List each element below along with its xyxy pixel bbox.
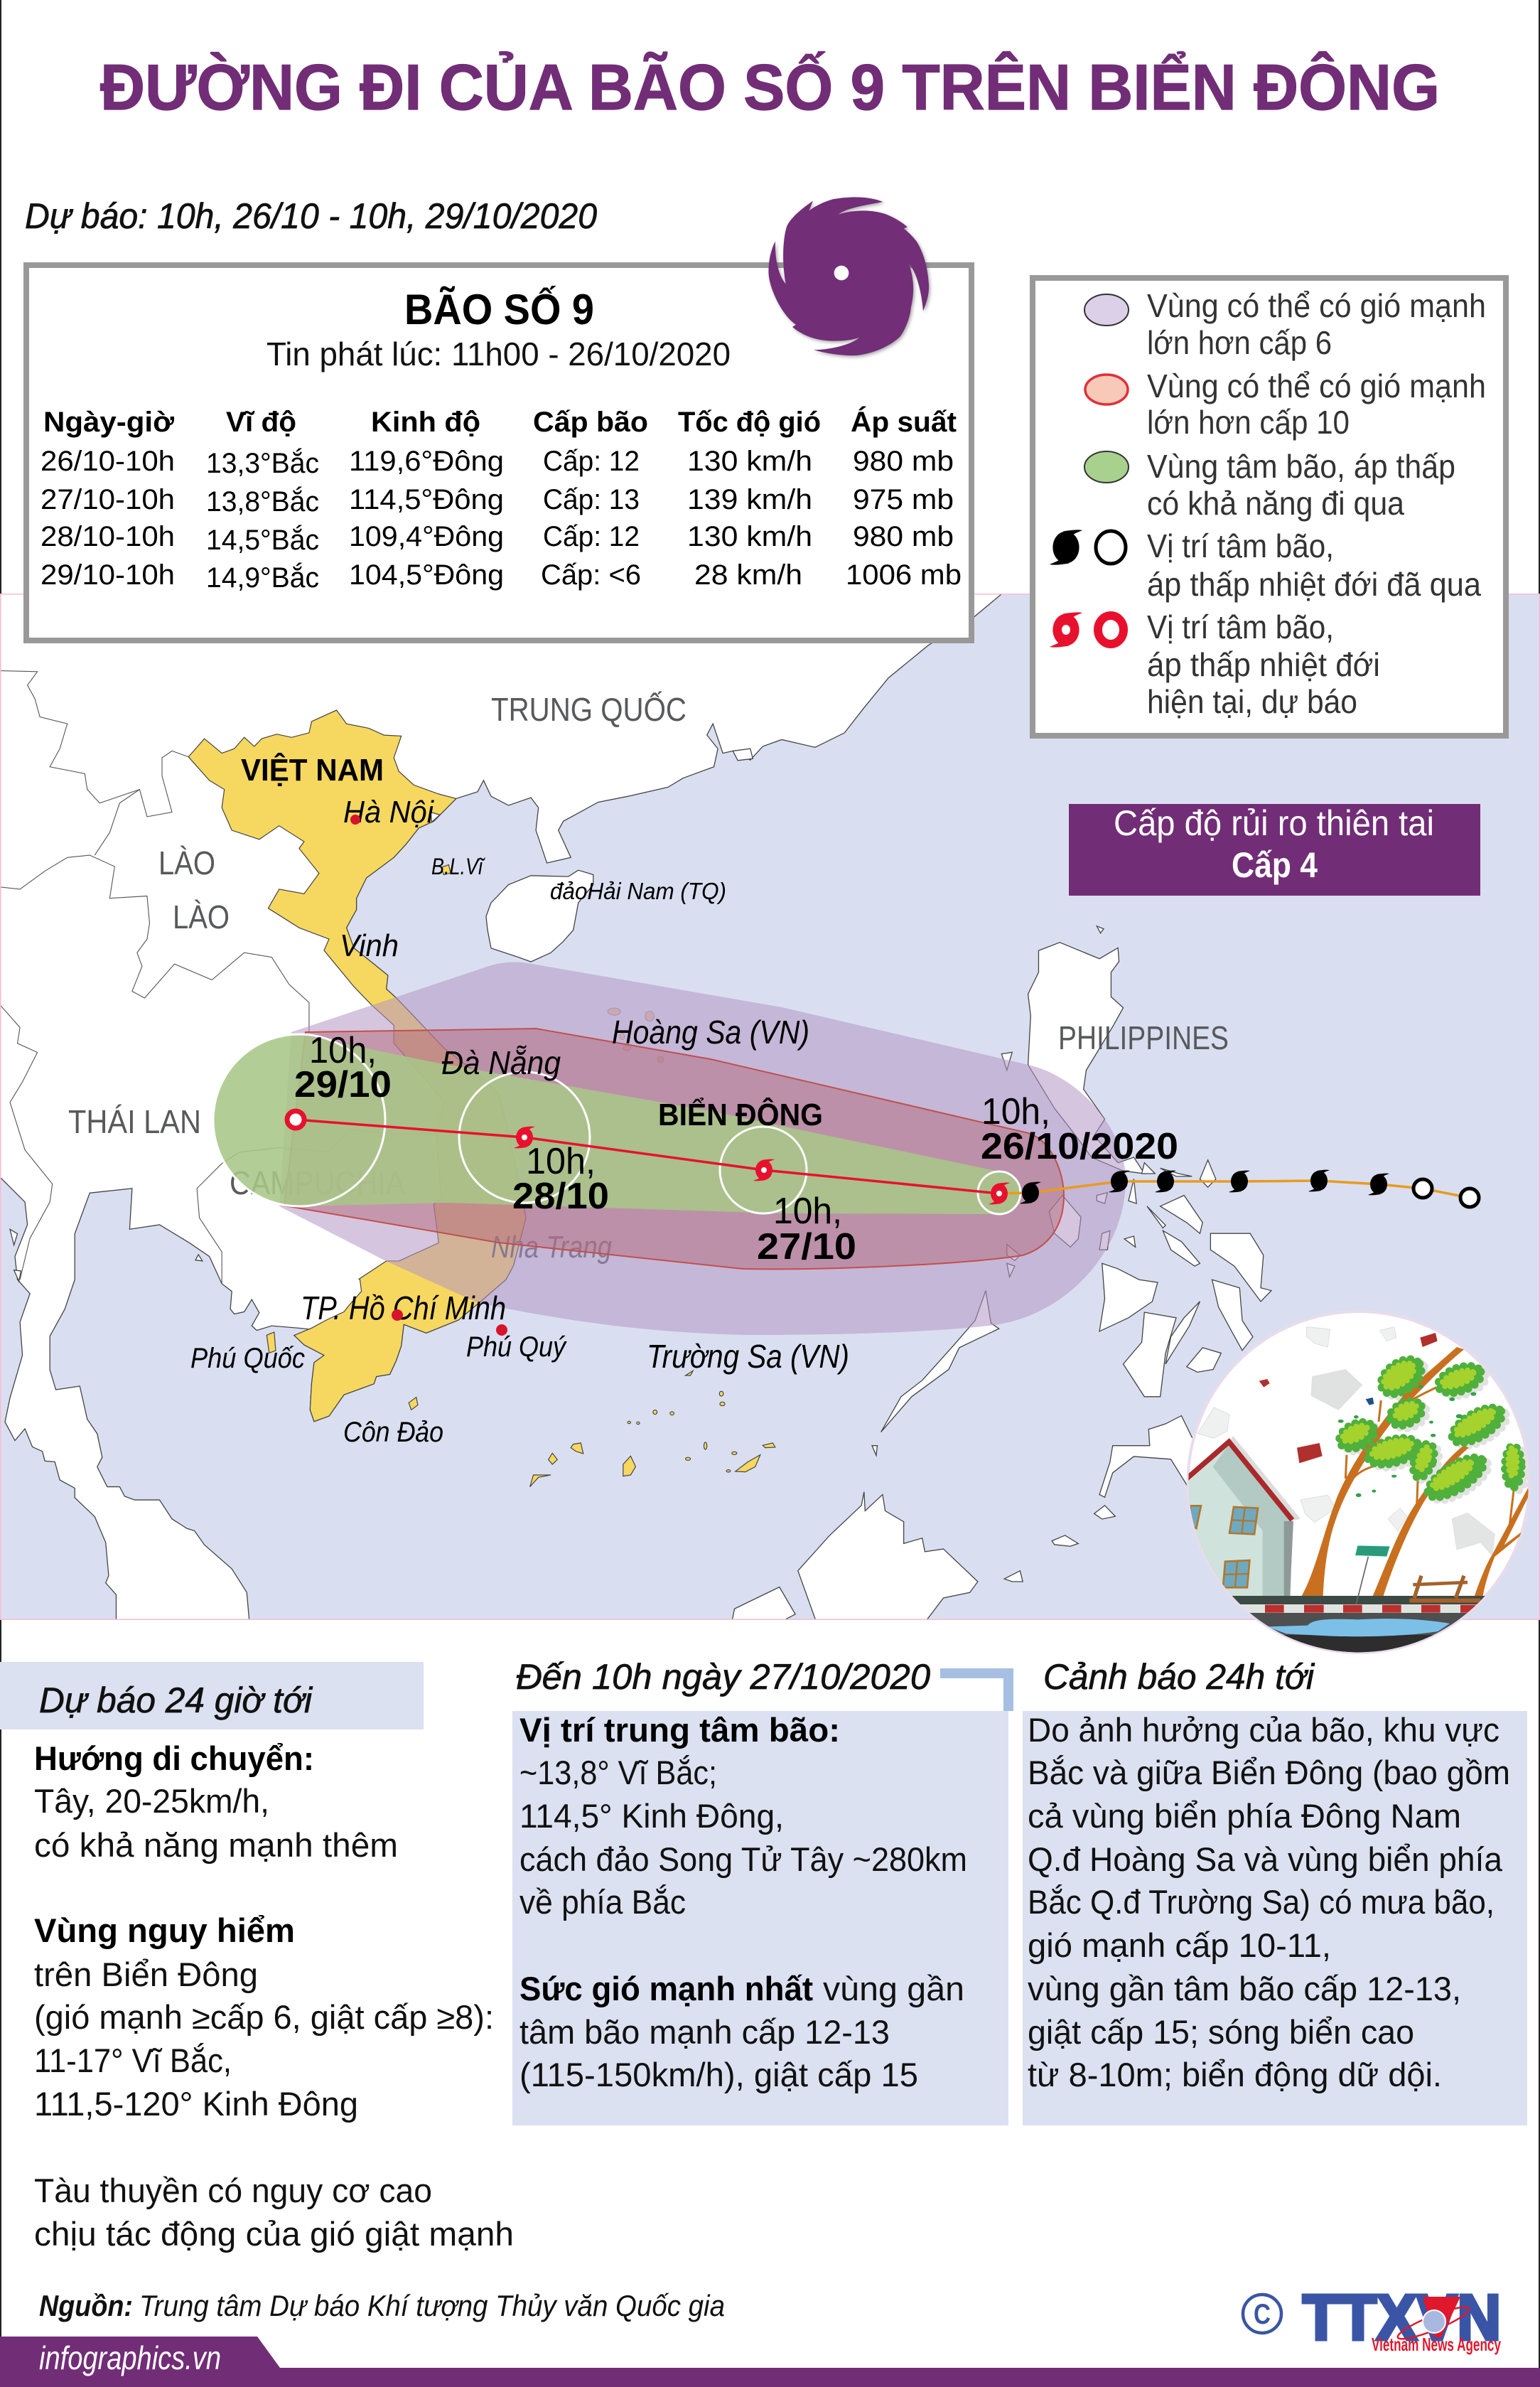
- movement direction text: có khả năng mạnh thêm: [34, 1826, 398, 1864]
- table row 26/10: 130 km/h: [687, 446, 812, 477]
- forecast track line: [296, 1120, 999, 1194]
- danger zone text: trên Biển Đông: [34, 1956, 258, 1993]
- country labels: THÁI LAN: [68, 1103, 201, 1140]
- trees: [1302, 1347, 1529, 1596]
- legend: wind above level 6: lớn hơn cấp 6: [1147, 324, 1332, 361]
- title: ĐƯỜNG ĐI CỦA BÃO SỐ 9 TRÊN BIỂN ĐÔNG: [100, 51, 1440, 124]
- fence: [1409, 1576, 1480, 1601]
- panel: 24h warning text: Bắc và giữa Biển Đông (bao gồm: [1028, 1754, 1510, 1791]
- forecast storm positions: [287, 1111, 1010, 1204]
- table row 29/10: 29/10-10h: [41, 559, 175, 591]
- country labels: TRUNG QUỐC: [491, 691, 686, 728]
- place labels: [190, 795, 849, 1448]
- wind strength text: [519, 1970, 964, 2093]
- table header: Áp suất: [851, 406, 957, 438]
- danger zone text: (gió mạnh ≥cấp 6, giật cấp ≥8):: [34, 1998, 494, 2036]
- legend: wind above level 10: Vùng có thể có gió mạnh: [1147, 368, 1486, 404]
- table row 28/10: Cấp: 12: [543, 521, 640, 552]
- country labels: LÀO: [158, 844, 215, 881]
- country labels: BIỂN ĐÔNG: [658, 1096, 823, 1132]
- logo: TTXVN: TTXVN: [1303, 2283, 1501, 2354]
- ships warning text: chịu tác động của gió giật mạnh: [34, 2215, 514, 2253]
- table row 27/10: 139 km/h: [687, 484, 812, 515]
- table row 26/10: 980 mb: [853, 446, 954, 477]
- table row 26/10: [41, 446, 954, 479]
- table row 29/10: [41, 559, 962, 594]
- islands: Hoàng Sa: [608, 1008, 664, 1063]
- danger zone text: 111,5-120° Kinh Đông: [34, 2085, 358, 2123]
- panel: 24-hour forecast: [0, 1662, 514, 2253]
- position text: cách đảo Song Tử Tây ~280km: [519, 1840, 967, 1878]
- illustration: storm damage scene: [1187, 1311, 1530, 1656]
- table row 29/10: 28 km/h: [694, 559, 802, 591]
- danger zone text: [34, 1911, 494, 2123]
- land: Philippines and Borneo: [732, 926, 1271, 1622]
- legend: wind above level 6: Vùng có thể có gió mạnh: [1147, 287, 1486, 324]
- footer bar: [0, 2337, 1540, 2387]
- country labels: PHILIPPINES: [1058, 1019, 1229, 1056]
- danger zone text: Vùng nguy hiểm: [34, 1911, 295, 1949]
- panel: legend: [1033, 278, 1506, 736]
- panel: storm data table: [26, 265, 971, 640]
- land: Hainan: [486, 870, 593, 962]
- ships warning text: [34, 2172, 514, 2253]
- panel: 24h warning text: Bắc Q.đ Trường Sa) có mưa bão,: [1028, 1883, 1495, 1921]
- table row 27/10: 114,5°Đông: [349, 484, 504, 515]
- wind strength text: tâm bão mạnh cấp 12-13: [519, 2013, 890, 2051]
- table row 26/10: 119,6°Đông: [349, 446, 504, 477]
- map panel: [0, 594, 1540, 1622]
- table row 27/10: 975 mb: [853, 484, 954, 515]
- road and kerb: [1187, 1596, 1530, 1604]
- table row 28/10: 28/10-10h: [41, 521, 175, 552]
- icon: purple hurricane: [768, 197, 929, 355]
- panel: 24h warning text: vùng gần tâm bão cấp 12-13,: [1028, 1970, 1461, 2007]
- date labels on track: 10h,: [309, 1030, 377, 1071]
- position text: ~13,8° Vĩ Bắc;: [519, 1754, 717, 1791]
- footer bar: infographics.vn: [39, 2339, 221, 2376]
- place labels: B.L.Vĩ: [431, 854, 485, 879]
- heading: by 10h 27/10: Đến 10h ngày 27/10/2020: [516, 1657, 930, 1697]
- flying leaves: [1338, 1385, 1476, 1497]
- legend: wind above level 10: [1085, 368, 1486, 441]
- ships warning text: Tàu thuyền có nguy cơ cao: [34, 2172, 432, 2209]
- place labels: Côn Đảo: [343, 1417, 443, 1448]
- table header: [43, 406, 957, 438]
- zone: storm centre path: [213, 1034, 1021, 1214]
- tree foliage shadows: [1340, 1355, 1526, 1508]
- past storm positions: [1020, 1170, 1389, 1203]
- table row 28/10: [41, 521, 954, 556]
- place labels: Phú Quốc: [190, 1343, 305, 1374]
- table row 27/10: 13,8°Bắc: [206, 486, 319, 517]
- banner: disaster risk level: Cấp 4: [1232, 845, 1318, 885]
- source credit: Trung tâm Dự báo Khí tượng Thủy văn Quốc gia: [139, 2289, 725, 2322]
- place labels: Hoàng Sa (VN): [612, 1014, 809, 1051]
- place labels: TP. Hồ Chí Minh: [301, 1289, 506, 1326]
- table header: Kinh độ: [371, 407, 480, 438]
- label: Campuchia: CAMPUCHIA: [230, 1164, 405, 1201]
- past track line: [999, 1181, 1470, 1198]
- movement direction text: Hướng di chuyển:: [34, 1739, 314, 1777]
- panel: 24h warning text: giật cấp 15; sóng biển cao: [1028, 2013, 1414, 2051]
- legend: past positions: áp thấp nhiệt đới đã qua: [1147, 566, 1481, 603]
- legend: current and forecast positions: hiện tại, dự báo: [1147, 683, 1357, 720]
- table row 27/10: [41, 484, 954, 517]
- road sign: [1355, 1545, 1390, 1557]
- legend: wind above level 6: [1084, 287, 1486, 361]
- table row 29/10: 1006 mb: [846, 559, 962, 591]
- table row 27/10: Cấp: 13: [543, 484, 640, 515]
- issue time: Tin phát lúc: 11h00 - 26/10/2020: [266, 336, 731, 372]
- wind strength text: (115-150km/h), giật cấp 15: [519, 2056, 918, 2093]
- panel: 24h warning text: cả vùng biển phía Đông Nam: [1028, 1797, 1461, 1835]
- panel: 24h warning text: Do ảnh hưởng của bão, khu vực: [1028, 1711, 1499, 1749]
- heading banner: [0, 1662, 424, 1729]
- country labels: VIỆT NAM: [241, 752, 384, 788]
- position text: [519, 1711, 967, 1921]
- panel: 24h warning text: từ 8-10m; biển động dữ dội.: [1028, 2056, 1442, 2093]
- banner: disaster risk level: Cấp độ rủi ro thiên tai: [1114, 803, 1434, 843]
- legend: past positions: Vị trí tâm bão,: [1147, 527, 1334, 564]
- panel: storm position: [512, 1711, 1008, 2125]
- label: Nha Trang: Nha Trang: [491, 1230, 612, 1265]
- table row 28/10: 109,4°Đông: [349, 521, 504, 552]
- past depression positions: [1414, 1179, 1479, 1207]
- place labels: Phú Quý: [466, 1331, 568, 1363]
- legend: storm centre zone: Vùng tâm bão, áp thấp: [1147, 448, 1455, 485]
- movement direction text: Tây, 20-25km/h,: [34, 1782, 269, 1820]
- table row 27/10: 27/10-10h: [41, 484, 175, 515]
- land: Asian mainland: [0, 594, 1002, 1621]
- legend: storm centre zone: [1084, 448, 1455, 522]
- wind strength text: Sức gió mạnh nhất: [519, 1970, 813, 2007]
- position text: 114,5° Kinh Đông,: [519, 1797, 784, 1835]
- panel: 24h warning text: [1023, 1711, 1527, 2125]
- panel: 24h warning text: gió mạnh cấp 10-11,: [1028, 1926, 1331, 1964]
- papers and debris: [1197, 1327, 1495, 1555]
- source credit: Nguồn:: [39, 2289, 133, 2322]
- legend: current and forecast positions: Vị trí tâm bão,: [1147, 608, 1334, 645]
- table row 26/10: 26/10-10h: [41, 446, 175, 477]
- place labels: Đà Nẵng: [441, 1044, 561, 1081]
- table header: Tốc độ gió: [678, 407, 821, 438]
- date labels on track: 10h,: [773, 1191, 842, 1232]
- legend: current and forecast positions: áp thấp nhiệt đới: [1147, 646, 1380, 683]
- forecast radius circles: [213, 1034, 1021, 1214]
- heading: 24h warning: Cảnh báo 24h tới: [1043, 1657, 1315, 1697]
- date labels on track: 26/10/2020: [981, 1126, 1178, 1167]
- legend: storm centre zone: có khả năng đi qua: [1147, 485, 1404, 522]
- table row 28/10: 14,5°Bắc: [206, 524, 319, 556]
- date labels on track: 27/10: [757, 1226, 856, 1267]
- connector bracket: [940, 1673, 1008, 1711]
- date labels on track: 10h,: [981, 1091, 1050, 1132]
- legend: current and forecast positions: [1050, 608, 1380, 720]
- place labels: Vinh: [340, 928, 399, 963]
- table row 28/10: 130 km/h: [687, 521, 812, 552]
- table header: Ngày-giờ: [43, 407, 175, 438]
- table row 29/10: 14,9°Bắc: [206, 562, 319, 594]
- place labels: Hà Nội: [343, 795, 434, 830]
- table row 29/10: 104,5°Đông: [349, 559, 504, 591]
- table header: Vĩ độ: [226, 407, 296, 438]
- place labels: đảoHải Nam (TQ): [550, 878, 726, 904]
- heading banner: Dự báo 24 giờ tới: [39, 1680, 313, 1720]
- panel: 24h warning text: Q.đ Hoàng Sa và vùng biển phía: [1028, 1840, 1503, 1878]
- table row 29/10: Cấp: <6: [541, 559, 641, 591]
- forecast period subtitle: Dự báo: 10h, 26/10 - 10h, 29/10/2020: [25, 196, 597, 236]
- house: [1227, 1436, 1301, 1521]
- date labels on track: 28/10: [512, 1176, 609, 1217]
- legend: wind above level 10: lớn hơn cấp 10: [1147, 404, 1350, 441]
- position text: Vị trí trung tâm bão:: [519, 1711, 840, 1749]
- legend: past positions: [1050, 527, 1481, 603]
- city dots: [350, 815, 507, 1336]
- zone: strong wind above level 10: [284, 1029, 1064, 1269]
- country labels: [68, 691, 1229, 1140]
- movement direction text: [34, 1739, 398, 1864]
- banner: disaster risk level: [1069, 803, 1480, 896]
- position text: về phía Bắc: [519, 1883, 686, 1921]
- land: Vietnam: [188, 710, 526, 1422]
- foliage: [1335, 1352, 1522, 1505]
- table row 28/10: 980 mb: [853, 521, 954, 552]
- islands: Phú Quốc, Côn Đảo, Trường Sa: [266, 1332, 775, 1487]
- date labels on track: [294, 1030, 1178, 1267]
- date labels on track: 29/10: [294, 1064, 392, 1105]
- table header: Cấp bão: [533, 407, 648, 438]
- logo: TTXVN: C: [1254, 2299, 1271, 2330]
- danger zone text: 11-17° Vĩ Bắc,: [34, 2042, 232, 2079]
- country labels: LÀO: [173, 899, 230, 935]
- zone: strong wind above level 6: [279, 962, 1126, 1335]
- wind strength text: vùng gần: [823, 1970, 964, 2007]
- table row 26/10: 13,3°Bắc: [206, 447, 319, 479]
- place labels: Trường Sa (VN): [647, 1338, 849, 1375]
- table row 26/10: Cấp: 12: [543, 446, 640, 477]
- date labels on track: 10h,: [526, 1141, 596, 1182]
- foliage highlights: [1340, 1358, 1517, 1493]
- heading: storm name: BÃO SỐ 9: [404, 286, 594, 333]
